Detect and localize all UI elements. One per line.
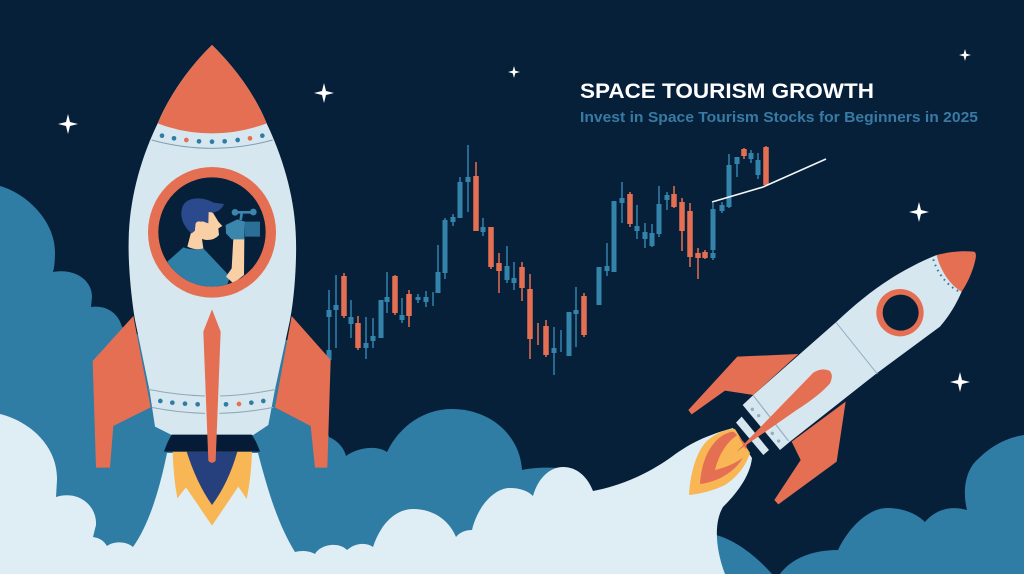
camera hand [226, 219, 245, 239]
flame middle [700, 432, 747, 484]
blue clouds [0, 186, 1024, 574]
rocket body [129, 45, 296, 435]
engine collar [164, 435, 260, 452]
window glass [883, 295, 919, 331]
torso [167, 247, 230, 288]
right fin [275, 316, 331, 468]
lower band lines [148, 389, 276, 413]
rocket body [753, 255, 962, 442]
flame inner [715, 435, 748, 470]
lower band dots [158, 399, 266, 407]
lower fin [774, 402, 846, 504]
upper fin [688, 354, 798, 414]
stars [58, 49, 971, 392]
nose band line [152, 140, 273, 148]
left rocket [93, 45, 331, 526]
right rocket [688, 251, 976, 504]
window with tourist [148, 167, 276, 298]
flame [173, 452, 252, 526]
flame core [187, 452, 237, 505]
camera body [245, 222, 260, 237]
candlestick chart [329, 145, 766, 375]
body seam [753, 322, 877, 441]
nose cone [937, 251, 976, 292]
flame outer [689, 429, 750, 495]
tail section [743, 395, 790, 450]
title: SPACE TOURISM GROWTH [580, 80, 874, 103]
window ring [148, 167, 276, 298]
arm [226, 238, 244, 283]
nose band dots [160, 133, 265, 144]
left fin [93, 316, 151, 468]
hair [181, 198, 224, 233]
nose cone [158, 45, 267, 133]
ear [195, 221, 201, 226]
trend line [712, 159, 826, 202]
nose dots [933, 259, 959, 292]
camera lens knobs [232, 209, 257, 216]
face [194, 212, 222, 240]
window ring [876, 289, 924, 336]
engine ring [736, 417, 769, 455]
tail dots [751, 408, 780, 443]
neck [187, 230, 203, 249]
window glass [158, 177, 266, 287]
tourist with camera [167, 198, 260, 288]
white clouds and exhaust plume [0, 414, 752, 574]
camera handle [238, 211, 250, 220]
subtitle: Invest in Space Tourism Stocks for Beginners in 2025 [580, 110, 978, 126]
center stripe [203, 309, 221, 463]
center stripe [737, 369, 832, 452]
